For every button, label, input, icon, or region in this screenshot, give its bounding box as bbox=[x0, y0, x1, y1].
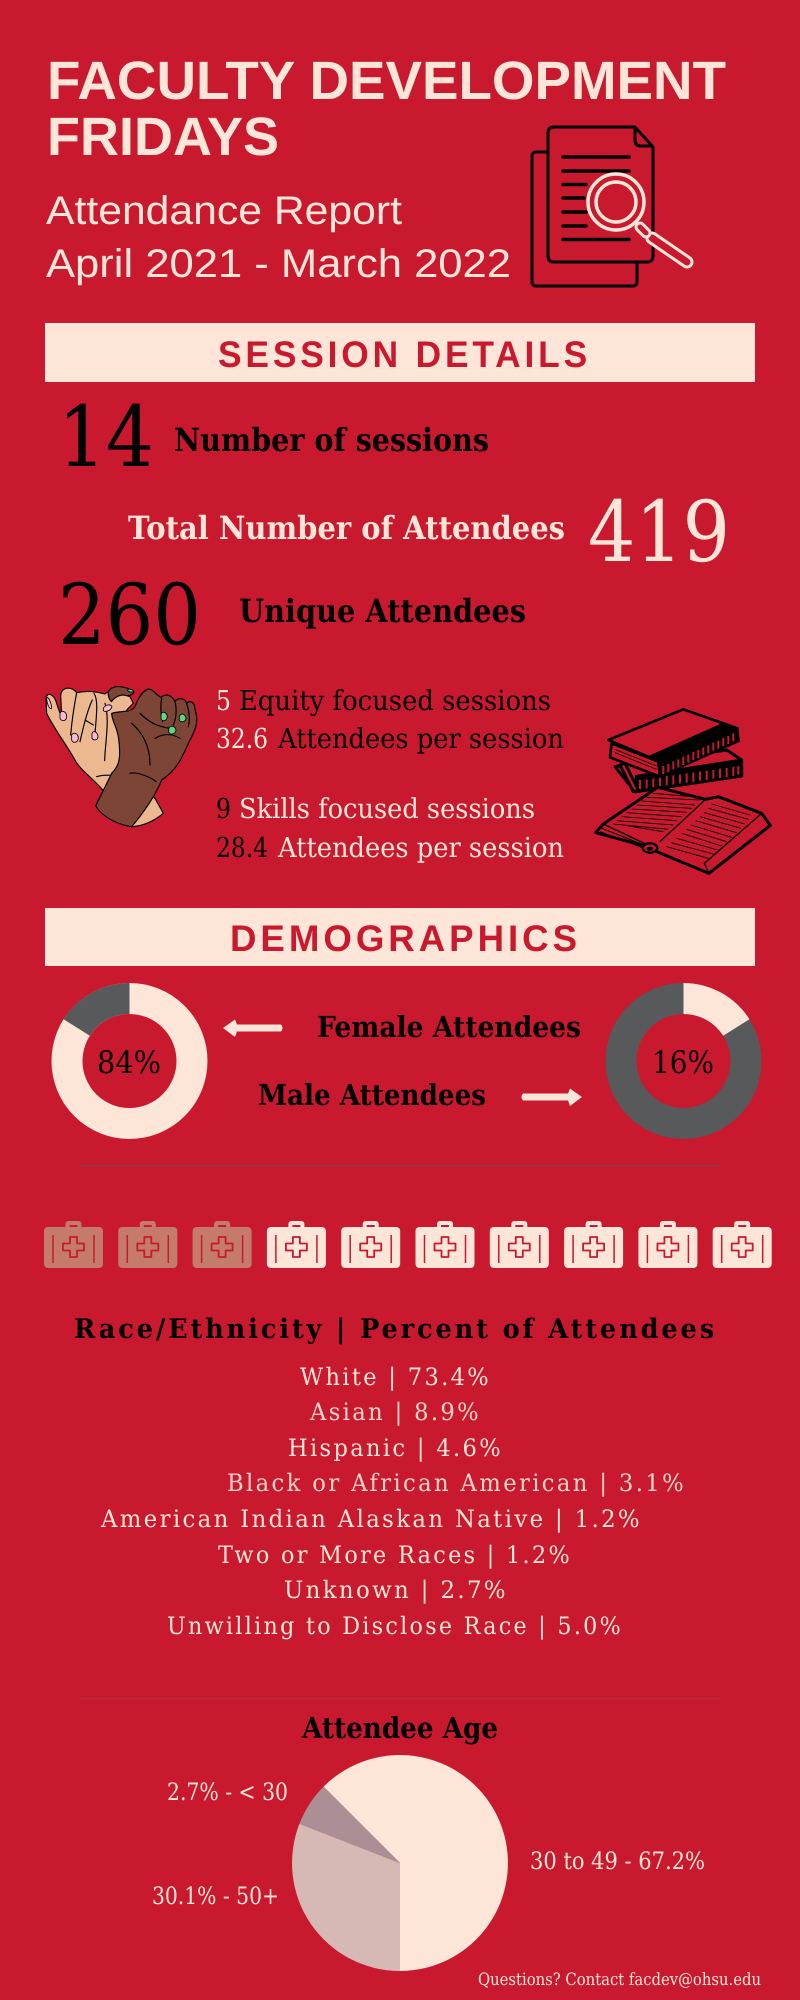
text: skills sessions: 9 bbox=[216, 793, 231, 825]
arrow: to male donut bbox=[522, 1088, 582, 1106]
subtitle: Attendance Report bbox=[46, 189, 402, 233]
label: female attendees: Female Attendees bbox=[317, 1010, 581, 1044]
text: equity sessions: Equity focused sessions bbox=[239, 685, 551, 717]
donut chart: female attendees: 84% bbox=[97, 1045, 161, 1081]
list: race and ethnicity percentages: American Indian Alaskan Native | 1.2% bbox=[100, 1505, 642, 1533]
text: equity sessions: 32.6 bbox=[216, 723, 268, 755]
label: 30 to 49: 30 to 49 - 67.2% bbox=[530, 1847, 705, 1875]
stat: unique attendees: Unique Attendees bbox=[239, 592, 526, 630]
subtitle: April 2021 - March 2022 bbox=[46, 242, 511, 286]
title: FACULTY DEVELOPMENT bbox=[47, 51, 726, 111]
donut chart: male attendees: 16% bbox=[652, 1045, 714, 1081]
stat: number of sessions bbox=[58, 388, 489, 486]
banner: demographics: DEMOGRAPHICS bbox=[230, 918, 581, 959]
heading: race and ethnicity: Race/Ethnicity | Percent of Attendees bbox=[74, 1314, 717, 1345]
stat: unique attendees: 260 bbox=[58, 566, 201, 664]
stat: number of sessions: Number of sessions bbox=[174, 421, 489, 459]
icon: document with magnifier bbox=[532, 127, 687, 286]
donut chart: male attendees bbox=[621, 983, 749, 1124]
stat: total attendees: 419 bbox=[588, 483, 730, 581]
arrow: to female donut bbox=[223, 1020, 282, 1037]
list: race and ethnicity percentages bbox=[100, 1363, 686, 1640]
label: male attendees: Male Attendees bbox=[258, 1078, 486, 1112]
list: race and ethnicity percentages: Asian | 8.9% bbox=[309, 1398, 481, 1426]
text: equity sessions: 5 bbox=[216, 685, 231, 717]
heading: attendee age: Attendee Age bbox=[301, 1711, 498, 1745]
title bbox=[47, 51, 726, 167]
text: skills sessions: 28.4 bbox=[216, 832, 268, 864]
footer contact: Questions? Contact facdev@ohsu.edu bbox=[478, 1970, 761, 1990]
pictogram: medical kits, 3 of 10 faded bbox=[44, 1221, 772, 1268]
icon: books bbox=[596, 709, 770, 873]
text: equity sessions bbox=[216, 685, 564, 755]
text: equity sessions: Attendees per session bbox=[277, 723, 564, 755]
text: skills sessions: Skills focused sessions bbox=[239, 793, 535, 825]
list: race and ethnicity percentages: Black or African American | 3.1% bbox=[227, 1469, 686, 1497]
stat: number of sessions: 14 bbox=[58, 388, 154, 486]
list: race and ethnicity percentages: Unknown | 2.7% bbox=[284, 1576, 508, 1604]
banner: session details: SESSION DETAILS bbox=[218, 334, 591, 375]
banner: session details bbox=[45, 323, 755, 382]
list: race and ethnicity percentages: White | 73.4% bbox=[300, 1363, 491, 1391]
stat: total attendees: Total Number of Attendees bbox=[128, 509, 565, 547]
banner: demographics bbox=[45, 908, 755, 966]
list: race and ethnicity percentages: Hispanic | 4.6% bbox=[288, 1434, 503, 1462]
label: 50 plus: 30.1% - 50+ bbox=[152, 1882, 279, 1910]
stat: total attendees bbox=[128, 483, 730, 581]
icon: linked hands bbox=[46, 687, 197, 827]
donut chart: female attendees bbox=[64, 983, 192, 1124]
list: race and ethnicity percentages: Unwilling to Disclose Race | 5.0% bbox=[167, 1612, 623, 1640]
stat: unique attendees bbox=[58, 566, 526, 664]
text: skills sessions: Attendees per session bbox=[277, 832, 564, 864]
label: under 30: 2.7% - < 30 bbox=[167, 1778, 288, 1806]
pie chart: attendee age bbox=[292, 1755, 508, 1971]
list: race and ethnicity percentages: Two or More Races | 1.2% bbox=[218, 1541, 572, 1569]
text: skills sessions bbox=[216, 793, 564, 864]
subtitle bbox=[46, 189, 511, 286]
title: FRIDAYS bbox=[47, 107, 279, 167]
